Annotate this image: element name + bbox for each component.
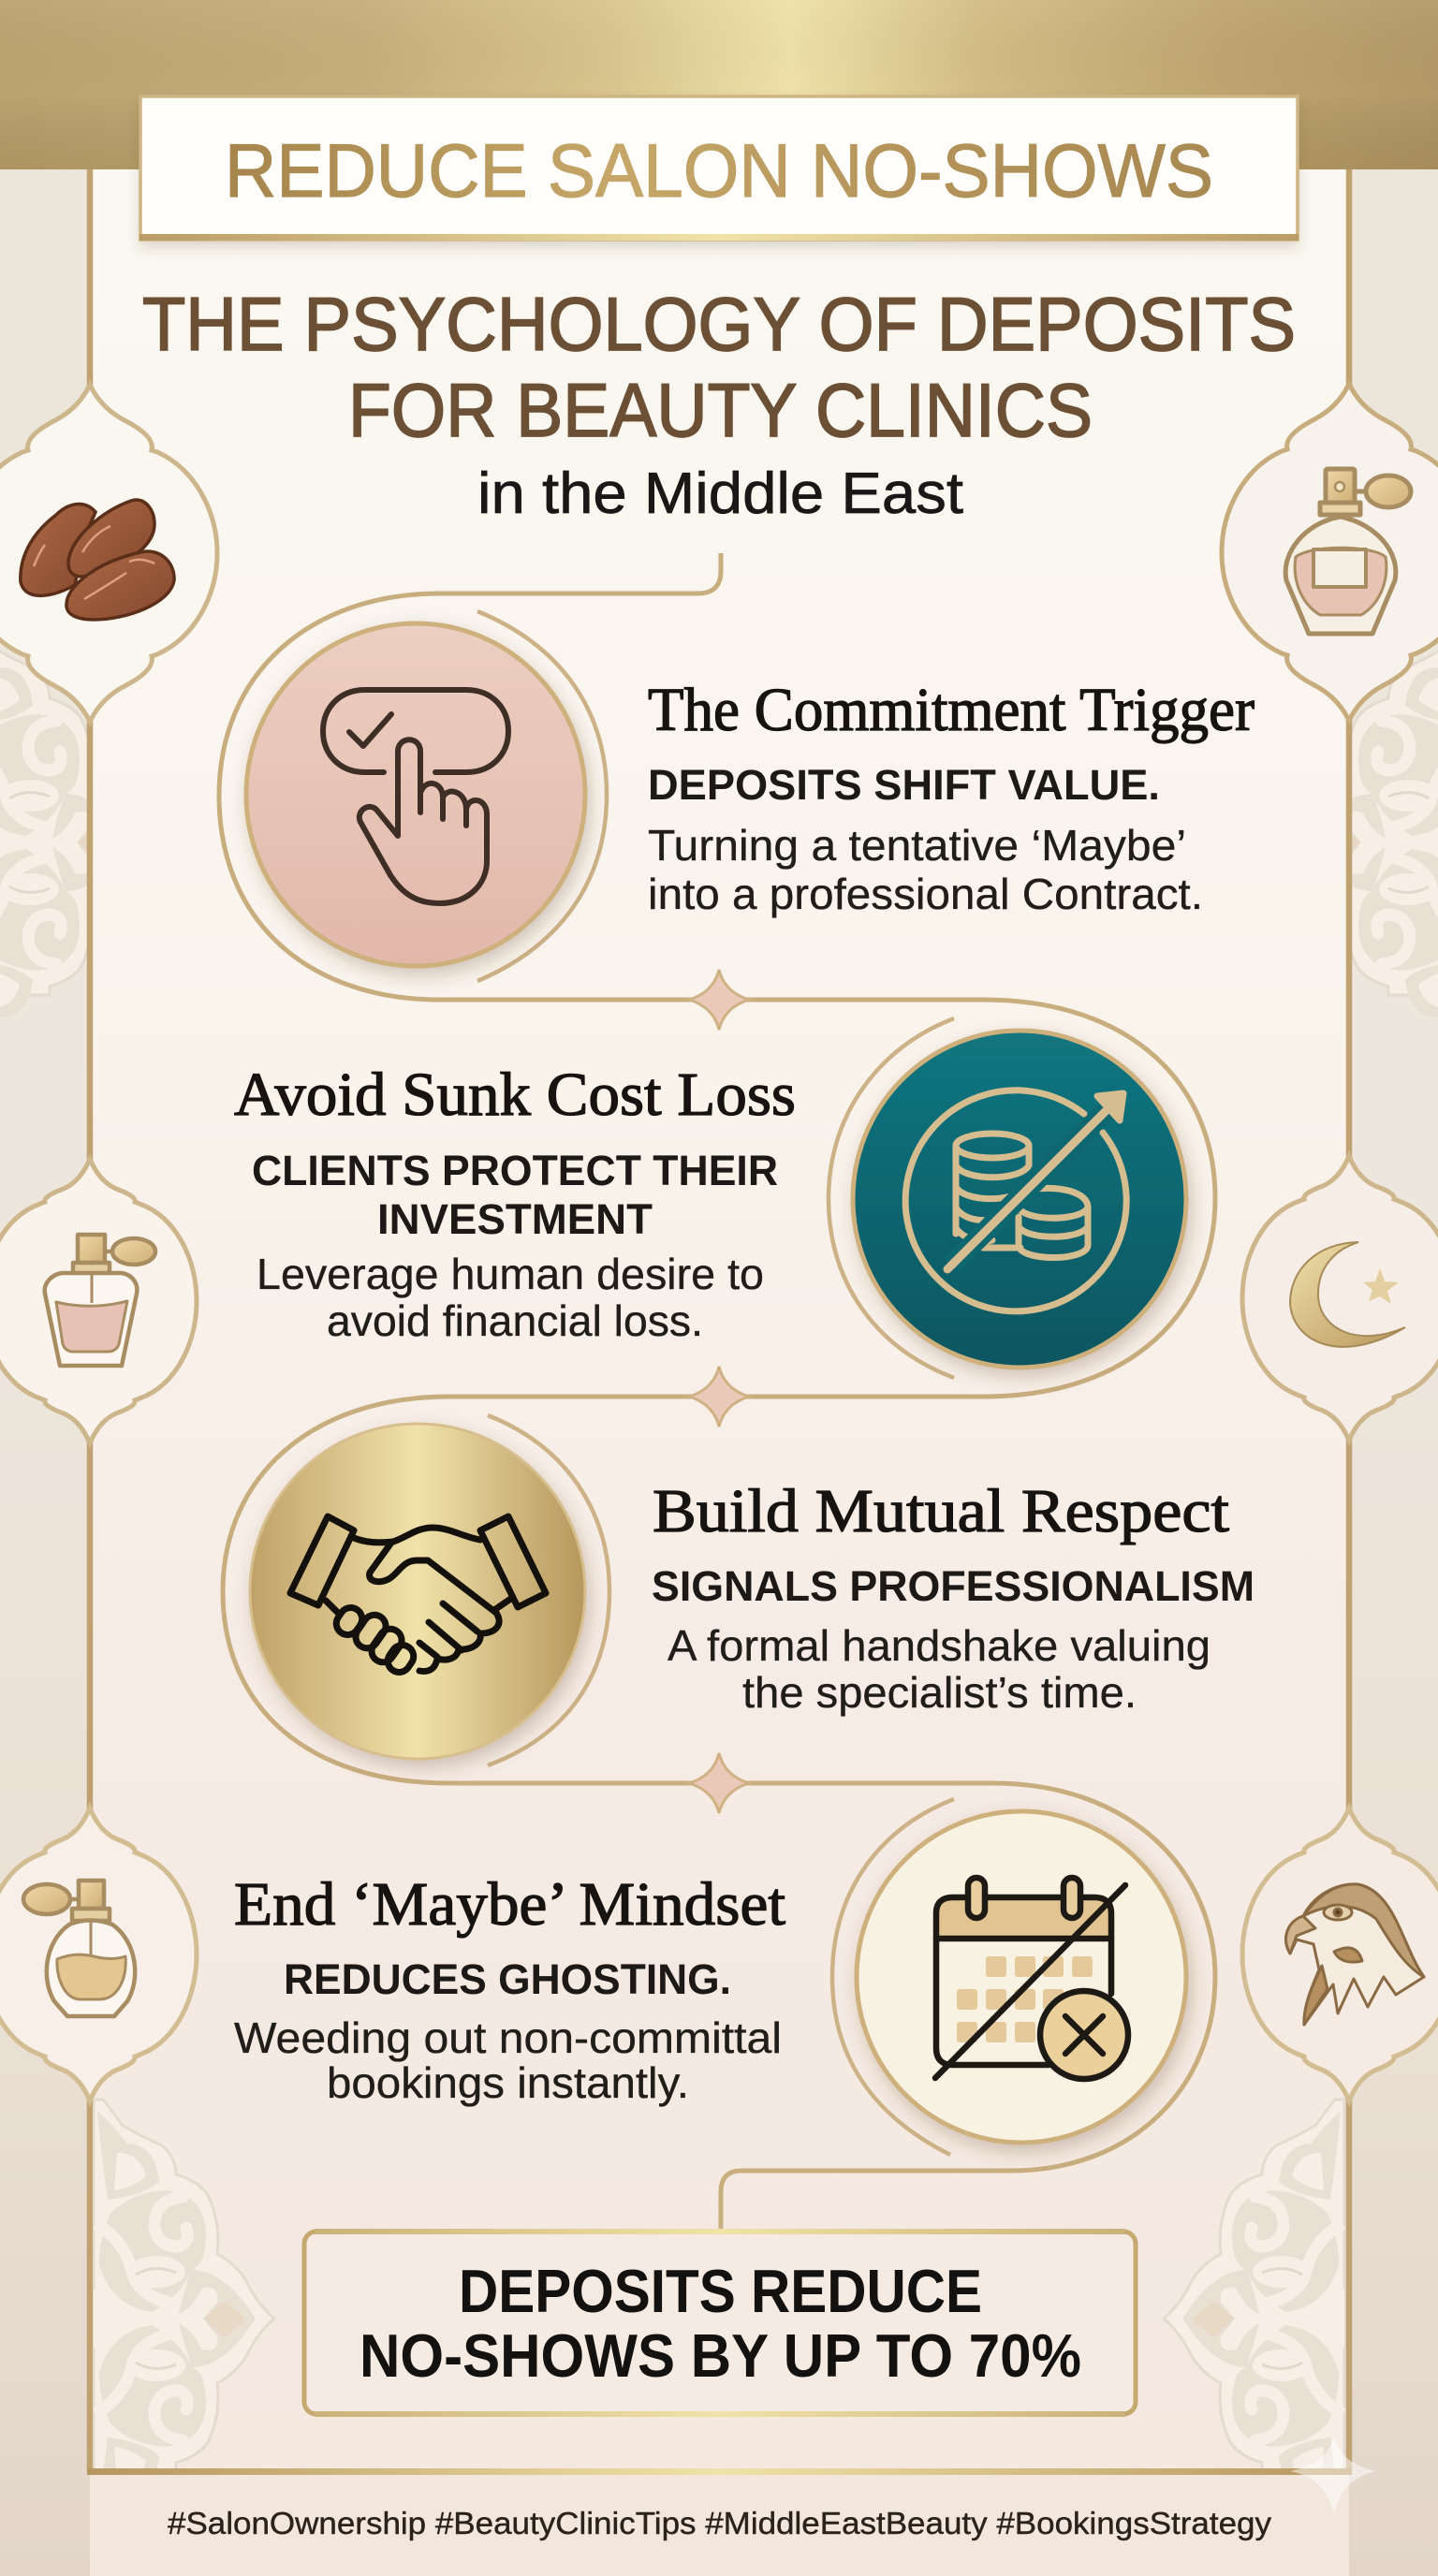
teal badge bbox=[853, 1031, 1186, 1368]
diamond ornaments bbox=[689, 970, 749, 1813]
subheading: SIGNALS PROFESSIONALISM bbox=[652, 1562, 1255, 1610]
body text bbox=[648, 821, 1203, 918]
body text: Leverage human desire to bbox=[257, 1250, 764, 1298]
body text: the specialist’s time. bbox=[742, 1668, 1137, 1717]
left side arabesque bbox=[0, 650, 87, 1017]
bottom-right arabesque bbox=[1162, 2099, 1346, 2468]
main heading: THE PSYCHOLOGY OF DEPOSITS bbox=[142, 283, 1296, 367]
connector path bbox=[219, 553, 1215, 2229]
callout text: DEPOSITS REDUCE bbox=[459, 2257, 982, 2325]
frame lines bbox=[90, 169, 1349, 2471]
gold top band bbox=[0, 0, 1438, 169]
footer strip bbox=[90, 2471, 1349, 2576]
frame bottom edge bbox=[87, 2468, 1352, 2475]
pink badge bbox=[246, 623, 585, 966]
callout box bbox=[304, 2229, 1136, 2417]
icon: perfume bottle lower left bbox=[23, 1881, 135, 2016]
main heading: FOR BEAUTY CLINICS bbox=[348, 369, 1093, 453]
icon: perfume bottle top right bbox=[1285, 469, 1411, 634]
icon: falcon head bbox=[1286, 1884, 1424, 2025]
icon: crescent and star bbox=[1290, 1242, 1405, 1347]
subheading: REDUCES GHOSTING. bbox=[284, 1955, 731, 2003]
accent arc bbox=[832, 1799, 954, 2155]
body text: bookings instantly. bbox=[327, 2058, 689, 2107]
title banner bbox=[139, 95, 1299, 241]
heading: Avoid Sunk Cost Loss bbox=[234, 1061, 796, 1129]
medallion: dates bbox=[0, 385, 217, 722]
subheading bbox=[252, 1147, 778, 1243]
callout text: NO-SHOWS BY UP TO 70% bbox=[360, 2321, 1081, 2390]
subheading: INVESTMENT bbox=[377, 1195, 653, 1243]
body text: Turning a tentative ‘Maybe’ bbox=[648, 821, 1186, 870]
medallion: perfume left bbox=[0, 1159, 197, 1443]
medallion: perfume lower left bbox=[0, 1808, 197, 2101]
accent arc bbox=[477, 611, 607, 981]
main heading bbox=[142, 283, 1296, 453]
subheading: DEPOSITS SHIFT VALUE. bbox=[648, 761, 1160, 809]
heading: The Commitment Trigger bbox=[648, 676, 1255, 744]
icon: handshake bbox=[290, 1516, 546, 1676]
medallion: perfume top right bbox=[1222, 384, 1438, 721]
body text bbox=[257, 1250, 764, 1345]
banner title text: REDUCE SALON NO-SHOWS bbox=[225, 129, 1213, 213]
body text: avoid financial loss. bbox=[327, 1296, 703, 1345]
icon: hand tapping button bbox=[323, 690, 508, 903]
icon: coins with upward arrow bbox=[905, 1090, 1126, 1311]
heading: Build Mutual Respect bbox=[653, 1477, 1229, 1545]
hashtags: #SalonOwnership #BeautyClinicTips #MiddleEastBeauty #BookingsStrategy bbox=[168, 2506, 1272, 2540]
section 2: avoid sunk cost loss bbox=[234, 1018, 1186, 1378]
medallion: crescent bbox=[1242, 1156, 1438, 1441]
body text: Weeding out non-committal bbox=[234, 2013, 782, 2062]
icon: perfume bottle left bbox=[45, 1235, 155, 1366]
body text: into a professional Contract. bbox=[648, 870, 1203, 918]
body text bbox=[668, 1621, 1211, 1717]
bottom-left arabesque bbox=[94, 2099, 276, 2468]
icon: dates bbox=[21, 500, 174, 620]
gold badge bbox=[250, 1424, 585, 1759]
callout text bbox=[360, 2257, 1081, 2390]
heading: End ‘Maybe’ Mindset bbox=[234, 1870, 785, 1939]
section 4: end maybe mindset bbox=[234, 1799, 1186, 2155]
icon: crossed-out calendar bbox=[935, 1878, 1128, 2079]
sparkle bbox=[1290, 2437, 1376, 2515]
medallion: falcon bbox=[1242, 1808, 1438, 2101]
section 3: build mutual respect bbox=[250, 1415, 1255, 1765]
body text bbox=[234, 2013, 782, 2107]
accent arc bbox=[488, 1415, 609, 1765]
cream badge bbox=[857, 1811, 1186, 2143]
subheading: CLIENTS PROTECT THEIR bbox=[252, 1147, 778, 1194]
subtitle: in the Middle East bbox=[477, 461, 963, 526]
accent arc bbox=[829, 1018, 954, 1378]
body text: A formal handshake valuing bbox=[668, 1621, 1211, 1670]
section 1: the commitment trigger bbox=[246, 611, 1255, 981]
centre panel bbox=[90, 168, 1349, 2471]
right side arabesque bbox=[1352, 650, 1438, 1017]
